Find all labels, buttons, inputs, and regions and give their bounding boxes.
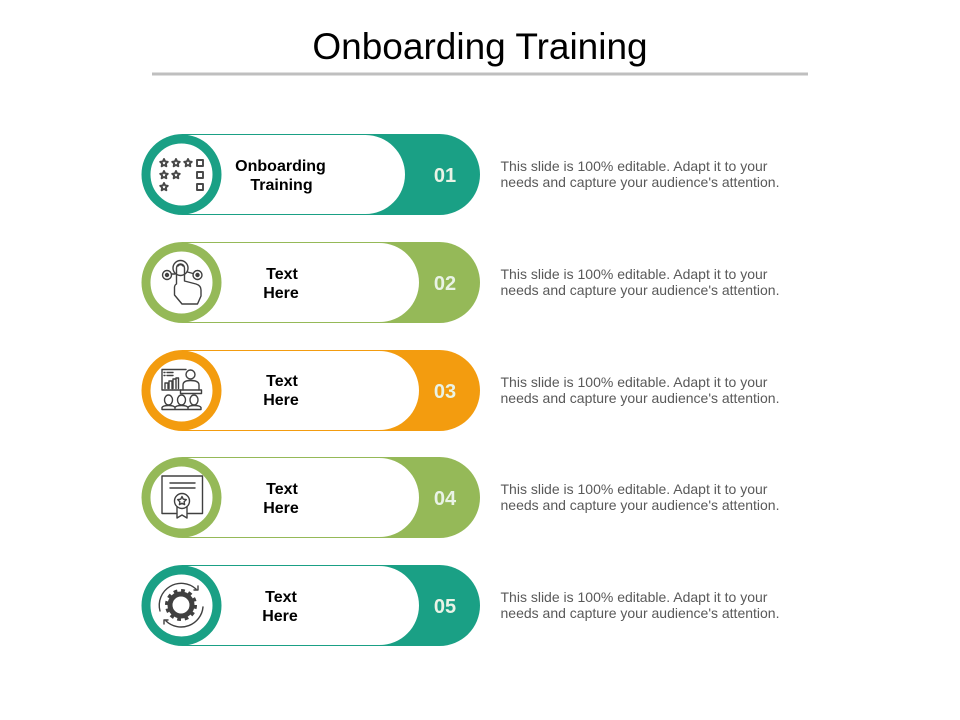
icon: star ratings checklist (160, 159, 203, 190)
pill background 5 (142, 565, 480, 646)
label 4: Text (266, 481, 299, 498)
title: Onboarding Training (312, 26, 648, 67)
row 3: text here (142, 350, 480, 431)
label 1: Onboarding (235, 158, 326, 175)
label 2: Text (266, 266, 299, 283)
pill background 1 (142, 134, 480, 215)
pill background 2 (142, 242, 480, 323)
description 1: This slide is 100% editable. Adapt it to your (500, 158, 768, 174)
description 4: This slide is 100% editable. Adapt it to your (500, 481, 768, 497)
ring 4 (146, 462, 217, 533)
row 2: text here (142, 242, 480, 323)
description 3: needs and capture your audience's attention. (500, 390, 779, 406)
white inner shape 3 (181, 351, 419, 430)
label 5: Text (265, 589, 298, 606)
label 4: Here (263, 500, 299, 517)
number 05: 05 (434, 596, 456, 618)
label 1: Training (250, 177, 313, 194)
description 4: needs and capture your audience's attention. (500, 497, 779, 513)
title underline (152, 72, 808, 76)
white inner shape 1 (181, 135, 405, 214)
description 3: This slide is 100% editable. Adapt it to your (500, 374, 768, 390)
icon: classroom presentation (162, 370, 202, 410)
description 5: This slide is 100% editable. Adapt it to your (500, 589, 768, 605)
ring 2 (146, 247, 217, 318)
description 2: needs and capture your audience's attention. (500, 282, 779, 298)
ring 5 (146, 570, 217, 641)
ring 3 (146, 355, 217, 426)
white inner shape 5 (181, 566, 419, 645)
ring 1 (146, 139, 217, 210)
number 02: 02 (434, 273, 456, 295)
label 5: Here (262, 608, 298, 625)
description 1: needs and capture your audience's attention. (500, 174, 779, 190)
label 3: Here (263, 392, 299, 409)
label 2: Here (263, 285, 299, 302)
description 2: This slide is 100% editable. Adapt it to your (500, 266, 768, 282)
white inner shape 2 (181, 243, 419, 322)
row 5: text here (142, 565, 480, 646)
icon: hand touching buttons (162, 260, 202, 304)
description 5: needs and capture your audience's attention. (500, 605, 779, 621)
icon: gear with cycle arrows (159, 583, 203, 627)
label 3: Text (266, 373, 299, 390)
number 03: 03 (434, 381, 456, 403)
pill background 4 (142, 457, 480, 538)
row 1: onboarding training (142, 134, 480, 215)
white inner shape 4 (181, 458, 419, 537)
row 4: text here (142, 457, 480, 538)
number 04: 04 (434, 488, 457, 510)
icon: certificate (162, 476, 202, 518)
number 01: 01 (434, 165, 456, 187)
pill background 3 (142, 350, 480, 431)
